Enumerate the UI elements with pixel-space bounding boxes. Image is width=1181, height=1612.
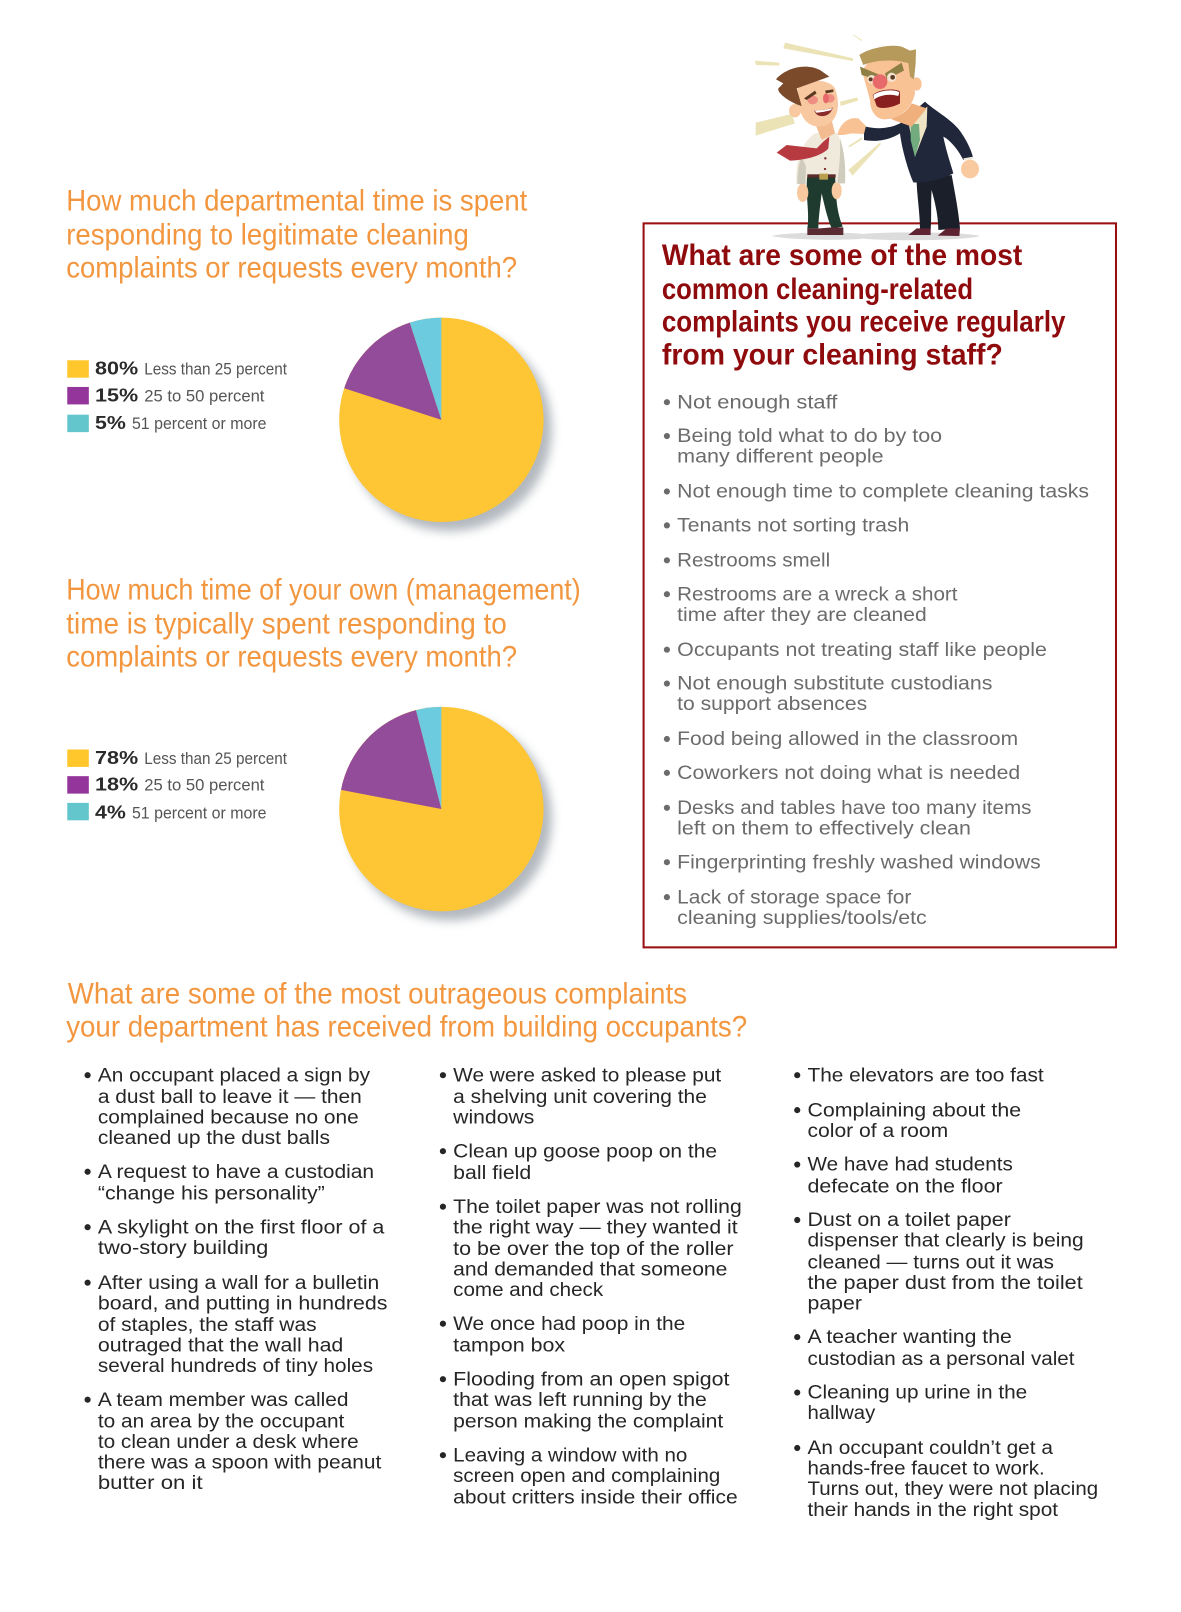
list column 1: outrageous complaints: An occupant placed a sign by (98, 1065, 371, 1086)
heading: management time: complaints or requests every month? (66, 640, 517, 673)
legend: departmental time: 5% (95, 412, 126, 433)
list column 3: outrageous complaints: Dust on a toilet paper (807, 1210, 1011, 1231)
staff complaints list: Restrooms smell (677, 550, 830, 571)
list column 2: outrageous complaints: ball field (453, 1163, 531, 1184)
staff complaints list: to support absences (677, 694, 867, 715)
list column 3: outrageous complaints: The elevators are too fast (807, 1065, 1044, 1086)
list column 2: outrageous complaints: We were asked to please put (453, 1065, 722, 1086)
list column 1: outrageous complaints: to an area by the occupant (98, 1411, 345, 1432)
list column 3: outrageous complaints: cleaned — turns out it was (807, 1252, 1054, 1273)
list column 2: outrageous complaints: to be over the top of the roller (453, 1239, 734, 1260)
list column 2: outrageous complaints: The toilet paper was not rolling (453, 1197, 742, 1218)
heading: management time: time is typically spent responding to (66, 608, 507, 641)
list column 2: outrageous complaints (440, 1065, 742, 1508)
legend: departmental time (67, 358, 287, 433)
staff complaints list: Lack of storage space for (677, 887, 911, 908)
heading: management time (66, 574, 581, 673)
employee figure (776, 67, 845, 235)
list column 2: outrageous complaints: Flooding from an open spigot (453, 1369, 730, 1390)
list column 3: outrageous complaints: color of a room (807, 1121, 948, 1142)
list column 3: outrageous complaints: the paper dust from the toilet (807, 1273, 1084, 1294)
list column 1: outrageous complaints: butter on it (98, 1473, 203, 1494)
staff complaints list: Food being allowed in the classroom (677, 729, 1018, 750)
staff complaints list: Tenants not sorting trash (677, 516, 909, 537)
boss figure (837, 46, 979, 236)
heading: departmental time: complaints or requests every month? (66, 251, 517, 284)
staff complaints list: Being told what to do by too (677, 426, 942, 447)
staff complaints list: Desks and tables have too many items (677, 798, 1031, 819)
heading: management time: How much time of your own (management) (66, 574, 581, 607)
list column 3: outrageous complaints: Cleaning up urine in the (807, 1383, 1027, 1404)
list column 1: outrageous complaints (85, 1065, 387, 1494)
panel heading: What are some of the most (662, 239, 1022, 272)
legend: management time (67, 747, 287, 822)
list column 1: outrageous complaints: several hundreds of tiny holes (98, 1356, 373, 1377)
shout rays (755, 34, 881, 176)
list column 2: outrageous complaints: about critters inside their office (453, 1487, 738, 1508)
legend: departmental time: Less than 25 percent (144, 360, 287, 379)
list column 2: outrageous complaints: tampon box (453, 1335, 566, 1356)
staff complaints list: Not enough substitute custodians (677, 674, 992, 695)
legend: management time: 4% (95, 801, 126, 822)
list column 2: outrageous complaints: windows (452, 1107, 534, 1128)
panel heading: from your cleaning staff? (662, 339, 1003, 372)
list column 2: outrageous complaints: come and check (453, 1280, 604, 1301)
list column 1: outrageous complaints: board, and putting in hundreds (98, 1293, 387, 1314)
list column 3: outrageous complaints: hallway (807, 1403, 876, 1424)
list column 2: outrageous complaints: screen open and complaining (453, 1466, 720, 1487)
staff complaints list: cleaning supplies/tools/etc (677, 908, 927, 929)
list column 3: outrageous complaints: Complaining about the (807, 1100, 1021, 1121)
pie chart: departmental time (339, 318, 552, 531)
list column 1: outrageous complaints: A request to have a custodian (98, 1162, 374, 1183)
heading: departmental time (66, 185, 528, 284)
list column 1: outrageous complaints: of staples, the staff was (98, 1315, 317, 1336)
list column 1: outrageous complaints: A skylight on the first floor of a (98, 1217, 385, 1238)
staff complaints list: Fingerprinting freshly washed windows (677, 852, 1041, 873)
list column 3: outrageous complaints: Turns out, they were not placing (807, 1479, 1098, 1500)
list column 3: outrageous complaints (794, 1065, 1098, 1521)
staff complaints list: Coworkers not doing what is needed (677, 763, 1020, 784)
legend: departmental time: 51 percent or more (132, 414, 266, 433)
staff complaints list: Not enough time to complete cleaning tasks (677, 482, 1089, 503)
staff complaints list: Restrooms are a wreck a short (677, 584, 958, 605)
staff complaints list: time after they are cleaned (677, 605, 927, 626)
legend: management time: 78% (95, 747, 138, 768)
legend: management time: Less than 25 percent (144, 749, 287, 768)
staff complaints list: left on them to effectively clean (677, 818, 971, 839)
list column 1: outrageous complaints: cleaned up the dust balls (98, 1128, 330, 1149)
list column 2: outrageous complaints: Leaving a window with no (453, 1445, 687, 1466)
list column 3: outrageous complaints: defecate on the floor (807, 1176, 1003, 1197)
heading: departmental time: responding to legitimate cleaning (66, 218, 469, 251)
list column 1: outrageous complaints: two-story building (98, 1238, 268, 1259)
legend: departmental time: 80% (95, 358, 138, 379)
list column 1: outrageous complaints: outraged that the wall had (98, 1335, 343, 1356)
floor shadow (772, 232, 980, 240)
list column 3: outrageous complaints: paper (807, 1293, 862, 1314)
list column 3: outrageous complaints: their hands in the right spot (807, 1500, 1059, 1521)
panel heading (662, 239, 1066, 372)
list column 3: outrageous complaints: We have had students (807, 1155, 1013, 1176)
heading: outrageous complaints (66, 977, 747, 1044)
panel heading: complaints you receive regularly (662, 306, 1066, 339)
list column 1: outrageous complaints: A team member was called (98, 1390, 348, 1411)
heading: outrageous complaints: What are some of the most outrageous complaints (68, 977, 687, 1010)
heading: departmental time: How much departmental time is spent (66, 185, 528, 218)
list column 2: outrageous complaints: and demanded that someone (453, 1259, 727, 1280)
staff complaints list (664, 392, 1089, 929)
panel heading: common cleaning-related (662, 273, 973, 306)
list column 2: outrageous complaints: Clean up goose poop on the (453, 1141, 717, 1162)
pie chart: management time (339, 707, 552, 920)
list column 2: outrageous complaints: person making the complaint (453, 1411, 724, 1432)
heading: outrageous complaints: your department has received from building occupants? (66, 1011, 747, 1044)
legend: management time: 25 to 50 percent (144, 776, 265, 795)
list column 2: outrageous complaints: a shelving unit covering the (453, 1087, 707, 1108)
panel: common complaints from cleaning staff (644, 223, 1116, 947)
list column 1: outrageous complaints: to clean under a desk where (98, 1432, 359, 1453)
list column 3: outrageous complaints: dispenser that clearly is being (807, 1231, 1084, 1252)
illustration: angry boss yelling at employee (755, 34, 980, 240)
panel border (644, 223, 1116, 947)
list column 1: outrageous complaints: a dust ball to leave it — then (98, 1087, 362, 1108)
list column 1: outrageous complaints: After using a wall for a bulletin (98, 1273, 379, 1294)
list column 2: outrageous complaints: that was left running by the (453, 1390, 707, 1411)
list column 3: outrageous complaints: A teacher wanting the (807, 1327, 1012, 1348)
legend: management time: 18% (95, 774, 138, 795)
list column 2: outrageous complaints: the right way — they wanted it (453, 1217, 738, 1238)
list column 3: outrageous complaints: An occupant couldn’t get a (807, 1438, 1053, 1459)
list column 3: outrageous complaints: hands-free faucet to work. (807, 1459, 1045, 1480)
list column 1: outrageous complaints: complained because no one (98, 1107, 359, 1128)
list column 3: outrageous complaints: custodian as a personal valet (807, 1349, 1075, 1370)
list column 1: outrageous complaints: “change his personality” (98, 1183, 325, 1204)
staff complaints list: Not enough staff (677, 392, 838, 413)
legend: departmental time: 25 to 50 percent (144, 386, 265, 405)
list column 2: outrageous complaints: We once had poop in the (453, 1314, 685, 1335)
legend: departmental time: 15% (95, 384, 138, 405)
list column 1: outrageous complaints: there was a spoon with peanut (98, 1453, 382, 1474)
staff complaints list: Occupants not treating staff like people (677, 640, 1047, 661)
legend: management time: 51 percent or more (132, 803, 266, 822)
staff complaints list: many different people (677, 447, 884, 468)
